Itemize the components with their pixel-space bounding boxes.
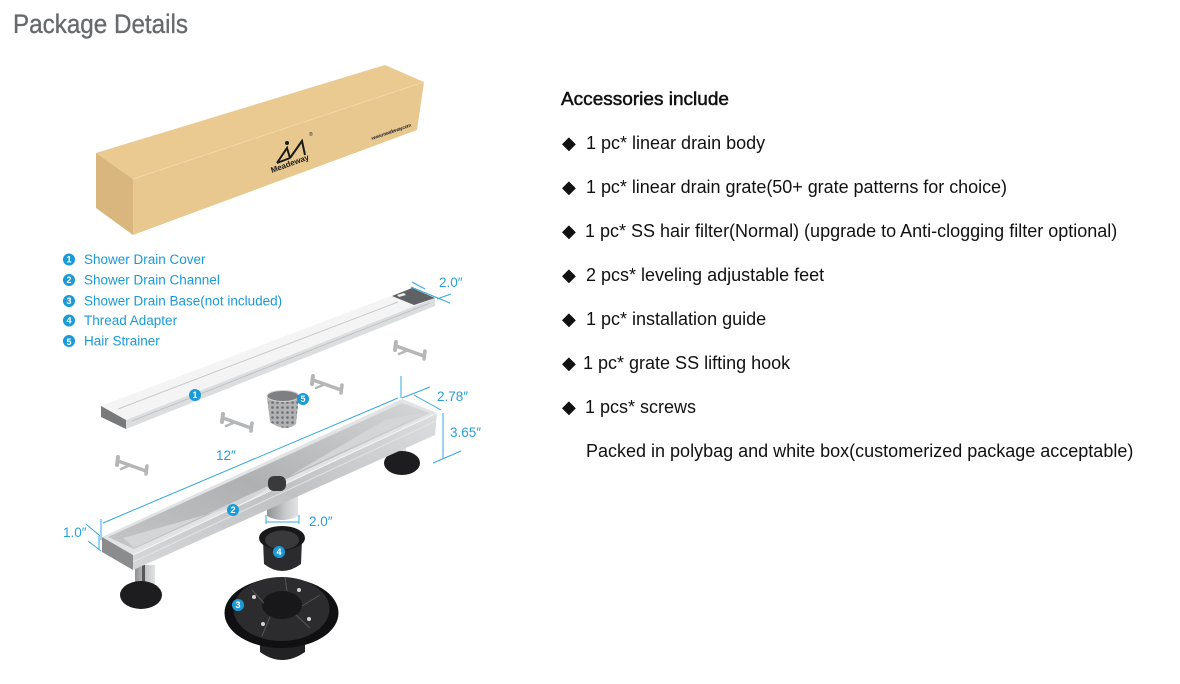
callout 2 [227, 504, 239, 516]
box logo [270, 131, 313, 175]
callout 1: 1 [192, 390, 198, 400]
outlet pipe [267, 478, 298, 520]
dimension: outlet diameter [266, 514, 333, 529]
parts legend [63, 252, 282, 348]
item: installation guide: ◆ [562, 309, 576, 329]
accessories list: 1 pc* linear drain grate(50+ grate patterns for choice) [586, 177, 1007, 197]
parts legend: Shower Drain Cover [84, 252, 206, 267]
cardboard box [96, 65, 424, 235]
accessories list: 1 pc* grate SS lifting hook [583, 353, 791, 373]
far foot of channel [384, 438, 420, 475]
parts legend: 5 [66, 337, 72, 347]
dimension: cover width: 2.0″ [439, 275, 463, 290]
drain cover [101, 288, 435, 429]
item: hair filter: ◆ [562, 221, 576, 241]
hair strainer [267, 390, 309, 428]
dimension: channel width: 2.78″ [437, 389, 468, 404]
parts legend: Hair Strainer [84, 334, 160, 348]
item: drain grate: ◆ [562, 177, 576, 197]
dimension: cover width [411, 275, 463, 303]
item: screws: ◆ [562, 397, 576, 417]
leveling foot bracket [117, 457, 147, 474]
dimension: outlet diameter: 2.0″ [309, 514, 333, 529]
leveling foot bracket [222, 414, 252, 431]
callout 1 [189, 389, 201, 401]
item: lifting hook: ◆ [562, 353, 576, 373]
leveling foot bracket [312, 376, 342, 393]
accessories list: 2 pcs* leveling adjustable feet [586, 265, 824, 285]
leveling foot bracket [395, 342, 425, 359]
accessories heading: Accessories include [561, 89, 729, 109]
accessories list [561, 89, 1133, 461]
title: Package Details [13, 9, 188, 39]
drain channel [102, 399, 437, 570]
dimension: channel depth [63, 524, 101, 551]
parts legend: 3 [66, 296, 72, 306]
dimension: channel length: 12″ [216, 448, 236, 463]
callout 2: 2 [230, 505, 236, 515]
accessories list: 1 pc* installation guide [586, 309, 766, 329]
callout 4: 4 [276, 547, 282, 557]
thread adapter [259, 526, 305, 571]
dimension: channel depth: 1.0″ [63, 525, 87, 540]
packaging note: Packed in polybag and white box(customerized package acceptable) [586, 441, 1133, 461]
accessories list: 1 pc* linear drain body [586, 133, 765, 153]
callout 5: 5 [300, 394, 306, 404]
item: drain body: ◆ [562, 133, 576, 153]
accessories list: 1 pc* SS hair filter(Normal) (upgrade to Anti-clogging filter optional) [585, 221, 1117, 241]
parts legend: 2 [66, 275, 72, 285]
box logo: ® [309, 131, 313, 138]
box website: www.meadeway.com [370, 122, 413, 142]
dimension: height: 3.65″ [450, 425, 481, 440]
parts legend: Shower Drain Channel [84, 272, 220, 288]
dimension: height [433, 413, 481, 463]
dimension: channel length [101, 376, 430, 540]
parts legend: 4 [66, 316, 72, 326]
drain base [224, 577, 338, 660]
parts legend: Shower Drain Base(not included) [84, 294, 282, 308]
callout 3: 3 [235, 600, 241, 610]
parts legend: Thread Adapter [84, 313, 178, 328]
dimension: channel width [414, 389, 468, 410]
parts legend: 1 [66, 254, 72, 264]
accessories list: 1 pcs* screws [585, 397, 696, 417]
box logo: Meadeway [270, 153, 311, 175]
item: adjustable feet: ◆ [562, 265, 576, 285]
near foot of channel [120, 565, 162, 609]
